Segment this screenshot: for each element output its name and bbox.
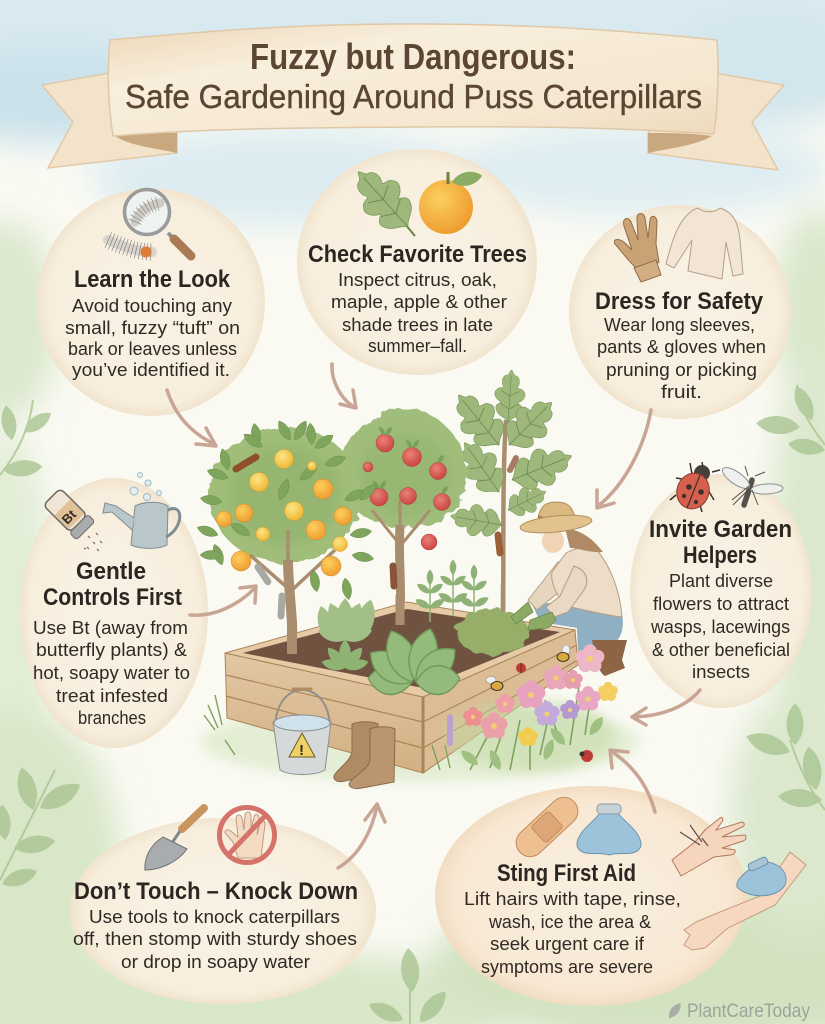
hat	[538, 502, 575, 519]
banner left fold	[115, 133, 177, 153]
herb clump	[314, 597, 379, 645]
body text: hot, soapy water to	[33, 663, 190, 683]
arrow: sting first aid to flowers	[610, 750, 655, 812]
body text: shade trees in late	[342, 315, 493, 335]
heading: Sting First Aid	[497, 860, 636, 887]
banner body	[108, 24, 718, 136]
body text: seek urgent care if	[490, 934, 645, 954]
body text: branches	[78, 708, 146, 728]
body text	[65, 296, 240, 380]
heading: Learn the Look	[74, 266, 231, 293]
ladybug on ground	[580, 750, 593, 762]
ground wash	[200, 702, 640, 782]
icon: wasp	[719, 464, 783, 505]
arrow: helpers to flowers	[632, 690, 700, 725]
panel: don't touch, knock down	[70, 808, 376, 1004]
heading: Check Favorite Trees	[308, 241, 527, 268]
boot	[592, 640, 627, 676]
banner left tail	[42, 73, 177, 168]
caterpillar on apple trunk	[393, 566, 394, 586]
raised bed	[225, 602, 578, 773]
heading: Dress for Safety	[595, 288, 764, 315]
body text: wasps, lacewings	[650, 617, 790, 637]
heading: Don’t Touch – Knock Down	[74, 878, 358, 905]
far arm	[528, 562, 568, 610]
title text: Safe Gardening Around Puss Caterpillars	[125, 78, 702, 115]
body text: Lift hairs with tape, rinse,	[464, 889, 681, 909]
title text: Fuzzy but Dangerous:	[250, 36, 576, 77]
grass tufts	[204, 695, 450, 770]
face	[542, 529, 564, 553]
caterpillars on citrus	[236, 457, 256, 469]
body text: pants & gloves when	[597, 337, 766, 357]
lettuce	[456, 609, 528, 655]
near arm	[546, 566, 587, 617]
citrus tree	[196, 419, 379, 654]
icon: bandage	[510, 792, 584, 862]
icon: watermark leaf	[666, 1001, 684, 1020]
small plant	[320, 639, 370, 673]
body text: insects	[692, 662, 750, 682]
flower patch	[445, 644, 618, 772]
plants in bed	[292, 560, 528, 696]
body text: wash, ice the area &	[488, 912, 651, 932]
body text: symptoms are severe	[481, 957, 653, 977]
icon: magnifying glass with caterpillars	[108, 190, 191, 258]
watermark: PlantCareToday	[687, 1001, 810, 1022]
sprig: right upper	[755, 383, 825, 458]
panel: learn the look	[37, 188, 265, 416]
central garden illustration	[196, 369, 640, 789]
heading: Controls First	[43, 584, 182, 611]
panel: sting first aid	[435, 786, 806, 1006]
body text: Use Bt (away from	[33, 618, 188, 638]
background leaf sprigs	[0, 383, 825, 1024]
body text: pruning or picking	[606, 360, 757, 380]
body text: Avoid touching any	[72, 296, 232, 316]
body text	[331, 270, 507, 356]
body text: summer–fall.	[368, 336, 467, 356]
spinach	[363, 625, 463, 696]
sprig: left upper	[0, 400, 55, 478]
panel: invite garden helpers	[630, 462, 812, 708]
panel: check favorite trees	[297, 149, 537, 375]
body text: maple, apple & other	[331, 292, 507, 312]
body text: fruit.	[661, 382, 702, 402]
icon: hand with tape	[672, 817, 746, 876]
heading: Gentle	[76, 558, 146, 585]
body text: Wear long sleeves,	[604, 315, 755, 335]
ladybug on bed	[516, 663, 526, 673]
sprig: left lower	[0, 765, 85, 891]
sprig: right lower	[743, 703, 825, 810]
body text: you’ve identified it.	[72, 360, 230, 380]
torso	[552, 547, 622, 617]
gardener	[511, 502, 627, 676]
panel: dress for safety	[569, 205, 791, 419]
gloves	[511, 602, 556, 630]
caterpillar on oak	[510, 458, 516, 470]
body text: Use tools to knock caterpillars	[89, 907, 340, 927]
arrow: learn the look to garden	[167, 390, 216, 446]
icon: arm with ice pack	[684, 852, 806, 950]
banner right fold	[648, 133, 712, 153]
title banner	[42, 24, 784, 170]
body text	[73, 907, 357, 972]
arrow: don't touch to bed	[338, 804, 385, 868]
hair	[565, 528, 603, 552]
title text	[125, 36, 702, 115]
heading: Helpers	[683, 542, 757, 569]
icon: Bt shaker: Bt	[59, 506, 80, 527]
apple tree	[340, 408, 467, 620]
banner right tail	[648, 73, 784, 170]
oak tree	[443, 369, 579, 612]
arrow: check trees to garden	[332, 364, 356, 408]
bucket with warning sign	[273, 689, 331, 774]
jeans	[533, 603, 623, 656]
insects in garden	[486, 645, 593, 762]
body text: treat infested	[56, 686, 168, 706]
sprig: bottom	[366, 947, 452, 1024]
icon: watering can	[103, 472, 180, 548]
icon: Bt shaker	[43, 488, 102, 551]
body text: flowers to attract	[653, 594, 789, 614]
body text: Plant diverse	[669, 571, 773, 591]
icon: sweater	[666, 208, 743, 279]
arrow: gentle controls to tree	[190, 586, 256, 615]
body text: or drop in soapy water	[121, 952, 310, 972]
body text	[33, 618, 190, 728]
body text: butterfly plants) &	[36, 640, 187, 660]
bucket with warning sign: !	[299, 742, 304, 759]
body text	[650, 571, 790, 682]
arrow: dress for safety to gardener	[597, 410, 651, 508]
heading: Invite Garden	[649, 516, 792, 543]
icon: ladybug	[670, 462, 720, 513]
icon: no-touch sign	[220, 808, 274, 862]
leafy stems	[414, 560, 490, 622]
caterpillar with orange head	[108, 240, 152, 258]
arrows	[167, 364, 700, 868]
bee	[486, 676, 503, 690]
icon: ice bag	[577, 804, 641, 855]
panel: gentle controls first	[20, 472, 208, 748]
body text: Inspect citrus, oak,	[338, 270, 497, 290]
heading	[43, 558, 182, 611]
body text	[597, 315, 766, 402]
body text: off, then stomp with sturdy shoes	[73, 929, 357, 949]
body text: bark or leaves unless	[68, 339, 237, 359]
body text: small, fuzzy “tuft” on	[65, 318, 240, 338]
body text: & other beneficial	[652, 640, 790, 660]
icon: oak leaf and orange	[342, 157, 484, 242]
body text	[464, 889, 681, 977]
icon: glove	[614, 214, 661, 282]
icon: trowel	[145, 808, 204, 870]
rubber boots	[334, 722, 395, 789]
heading	[649, 516, 792, 569]
bee	[557, 645, 570, 662]
